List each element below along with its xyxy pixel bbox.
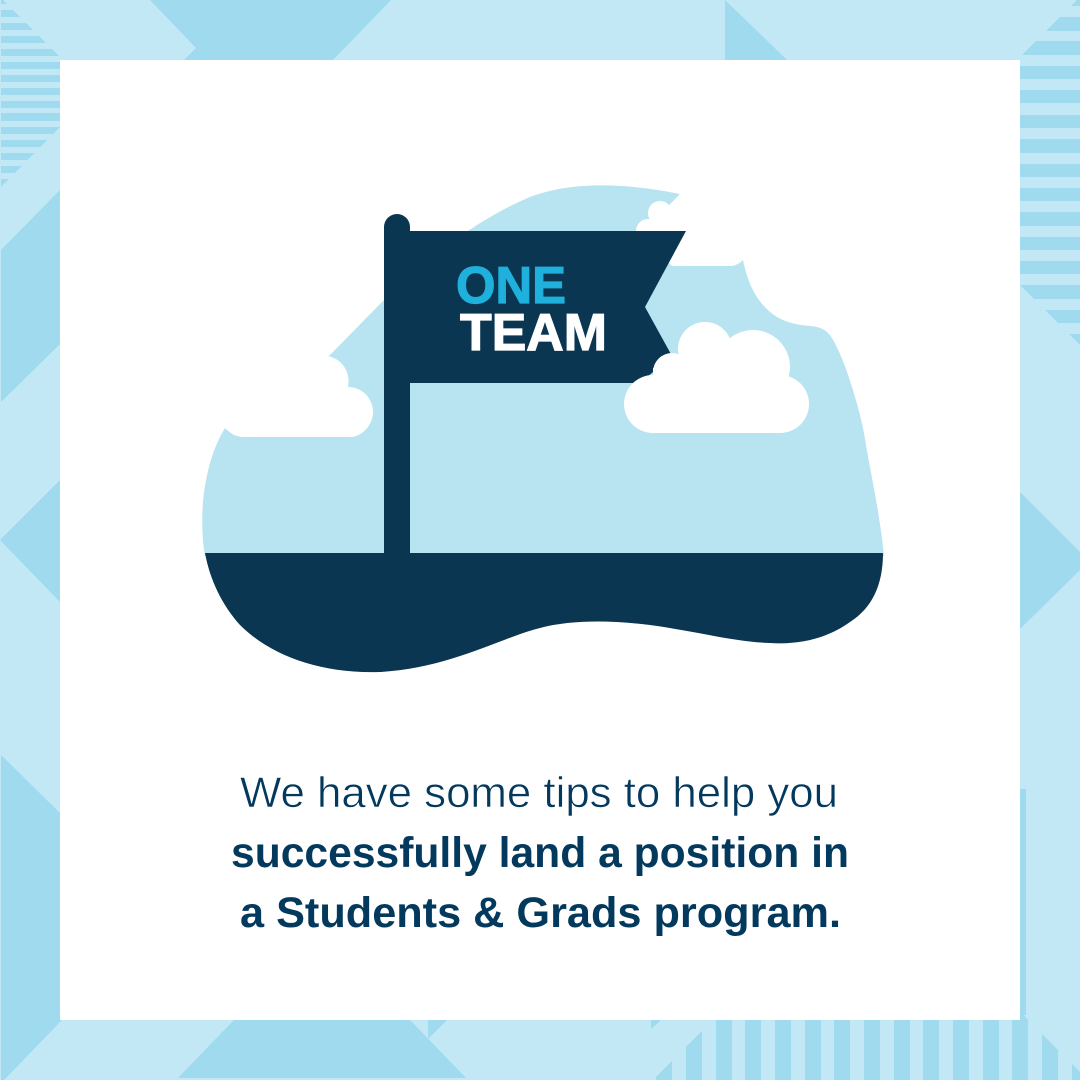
sky blob bbox=[202, 185, 884, 556]
caption line 1: We have some tips to help you bbox=[240, 769, 838, 817]
flag banner bbox=[405, 231, 686, 383]
cloud: left bbox=[225, 356, 373, 437]
border: bottom stripes bbox=[656, 789, 1080, 1080]
border: right triangle bbox=[1020, 492, 1080, 629]
caption line 2: successfully land a position in bbox=[231, 829, 849, 877]
flag pole bbox=[384, 214, 410, 553]
flag text: TEAM: TEAM bbox=[460, 304, 607, 362]
caption line 3: a Students & Grads program. bbox=[240, 889, 841, 937]
cloud: right bbox=[624, 322, 809, 433]
flag text: ONE: ONE bbox=[456, 257, 566, 315]
cloud: small top bbox=[636, 193, 692, 243]
border: bottom triangles bbox=[178, 1020, 661, 1078]
white panel bbox=[60, 60, 1020, 1020]
illustration: flag on hill bbox=[202, 185, 884, 672]
border: top triangles bbox=[150, 0, 787, 60]
border: left triangles bbox=[0, 190, 62, 1080]
border: left stripes bbox=[1, 0, 61, 187]
border: right stripes bbox=[1020, 0, 1080, 347]
ground bbox=[205, 553, 883, 672]
caption text bbox=[231, 769, 849, 937]
